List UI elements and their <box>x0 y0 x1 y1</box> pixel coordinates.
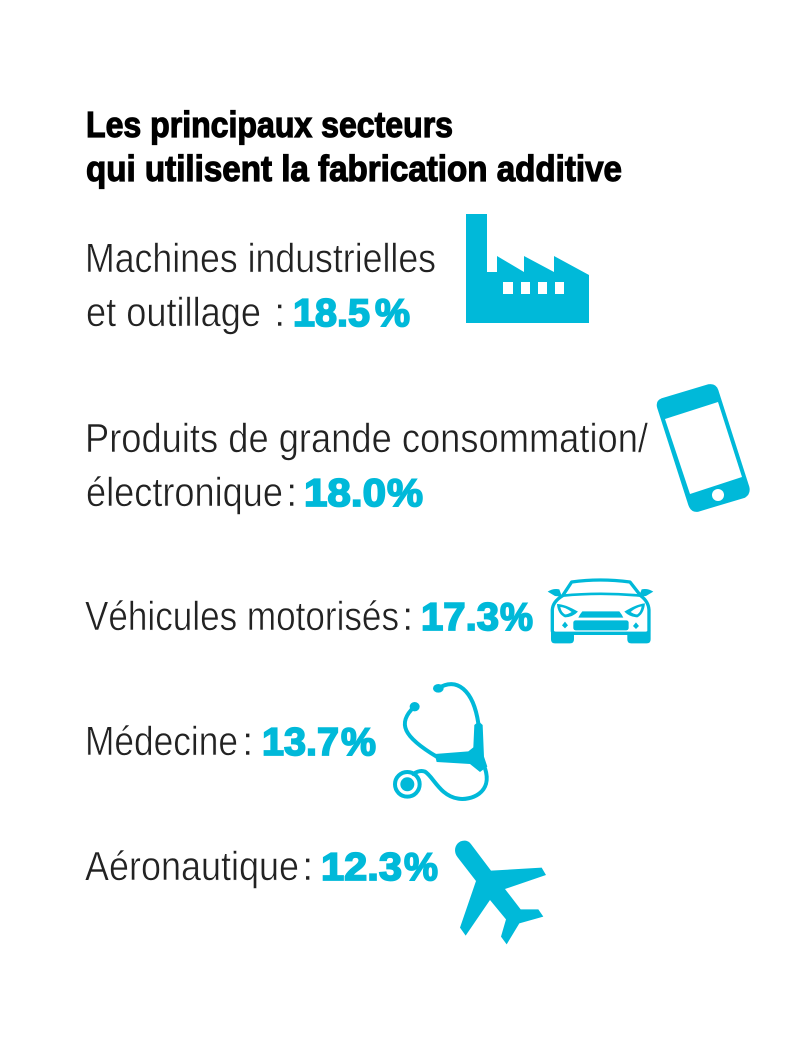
value: 17.3 %: 17.3 <box>421 596 499 639</box>
value: 18.5 % <box>293 292 410 335</box>
value: 18.0 %: % <box>387 472 423 515</box>
value: 13.7 %: % <box>341 721 376 764</box>
sector: véhicules motorisés <box>85 580 653 643</box>
value: 18.0 % <box>304 472 423 515</box>
sector: médecine <box>85 684 487 799</box>
label: véhicules motorisés: Véhicules motorisés <box>85 593 399 639</box>
value: 18.5 %: % <box>375 292 410 335</box>
label: machines industrielles: Machines industrielles <box>85 235 436 281</box>
value: 13.7 % <box>262 721 376 764</box>
title <box>86 104 622 189</box>
icon: airplane <box>455 841 546 944</box>
label: produits de grande consommation: électronique <box>86 469 283 515</box>
label: véhicules motorisés: : <box>402 593 413 639</box>
sector: aéronautique <box>85 841 546 944</box>
label: machines industrielles: et outillage <box>86 289 261 335</box>
title: Les principaux secteurs <box>86 104 453 145</box>
title: qui utilisent la fabrication additive <box>86 148 622 189</box>
value: 18.5 %: 18.5 <box>293 292 370 335</box>
sector: produits de grande consommation <box>85 384 750 515</box>
icon: smartphone <box>657 384 750 512</box>
icon: stethoscope <box>395 684 487 799</box>
value: 12.3 %: % <box>404 846 438 889</box>
value: 17.3 % <box>421 596 533 639</box>
value: 18.0 %: 18.0 <box>304 472 386 515</box>
label: produits de grande consommation <box>85 415 649 515</box>
value: 12.3 % <box>321 846 438 889</box>
value: 13.7 %: 13.7 <box>262 721 339 764</box>
value: 12.3 %: 12.3 <box>321 846 402 889</box>
label: machines industrielles <box>85 235 436 335</box>
value: 17.3 %: % <box>500 596 533 639</box>
label: médecine: Médecine <box>85 718 238 764</box>
label: aéronautique: : <box>302 843 313 889</box>
icon: car <box>548 580 653 643</box>
label: produits de grande consommation: : <box>286 469 297 515</box>
label: produits de grande consommation: Produits de grande consommation/ <box>85 415 649 461</box>
label: machines industrielles: : <box>274 289 285 335</box>
icon: factory <box>466 214 589 323</box>
label: médecine: : <box>242 718 253 764</box>
label: aéronautique: Aéronautique <box>85 843 299 889</box>
sector: machines industrielles <box>85 214 589 335</box>
